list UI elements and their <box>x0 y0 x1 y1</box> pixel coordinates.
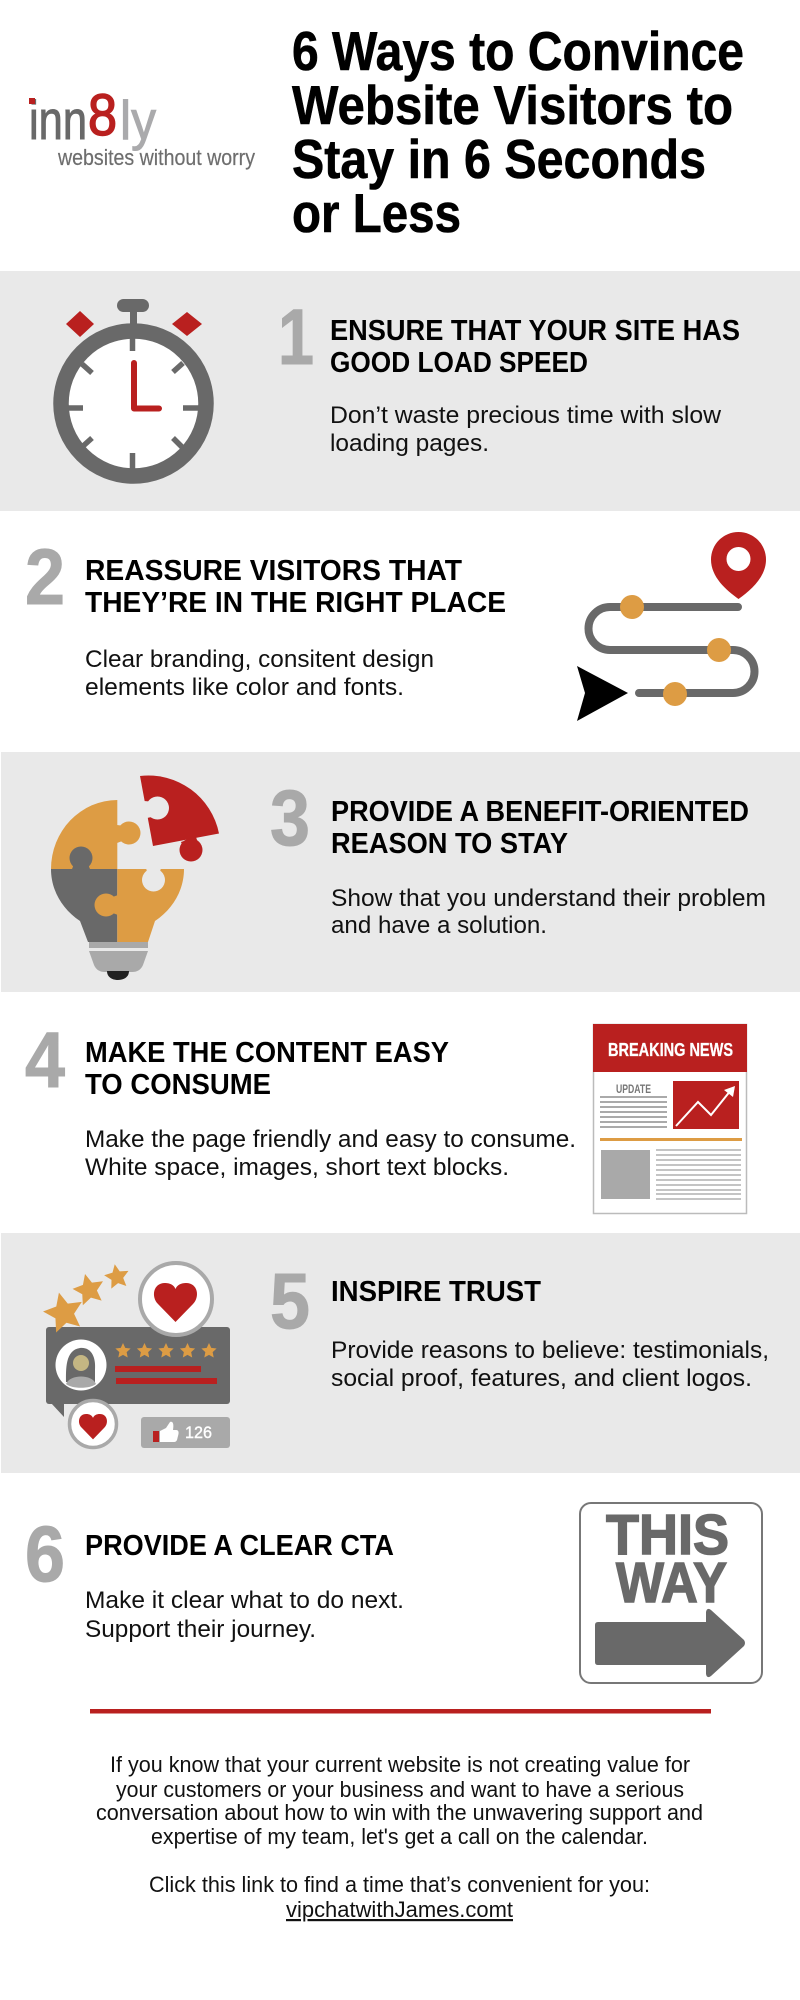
body 3: Show that you understand their problem <box>331 885 766 912</box>
heading 4 <box>85 1037 449 1101</box>
logo <box>29 83 255 170</box>
title: 6 Ways to Convince <box>292 20 744 82</box>
title: Website Visitors to <box>292 74 733 136</box>
body 1 <box>330 402 722 457</box>
body 5: Provide reasons to believe: testimonials, <box>331 1337 769 1364</box>
number 6: 6 <box>25 1509 65 1598</box>
logo: 8 <box>88 83 117 148</box>
icon: review bubble <box>40 1262 230 1448</box>
body 6: Make it clear what to do next. <box>85 1587 404 1614</box>
call to action link: Click this link to find a time that’s convenient for you: <box>149 1872 650 1897</box>
body 2: Clear branding, consitent design <box>85 646 434 673</box>
closing message: If you know that your current website is not creating value for <box>110 1752 690 1777</box>
heading 2 <box>85 555 506 619</box>
icon: route with map pin <box>577 532 766 721</box>
title: or Less <box>292 182 461 244</box>
icon: review bubble: 126 <box>185 1423 212 1442</box>
logo: websites without worry <box>57 145 255 170</box>
body 6 <box>85 1587 404 1643</box>
heading 1 <box>330 315 740 379</box>
body 6: Support their journey. <box>85 1616 316 1643</box>
heading 5: INSPIRE TRUST <box>331 1276 542 1308</box>
panel 1: load speed <box>0 271 800 511</box>
heading 1: GOOD LOAD SPEED <box>330 347 588 379</box>
logo: inn <box>29 89 87 151</box>
icon: newspaper: BREAKING NEWS <box>608 1039 733 1060</box>
closing message: your customers or your business and want to have a serious <box>116 1777 684 1802</box>
heading 4: TO CONSUME <box>85 1069 271 1101</box>
number 4: 4 <box>25 1015 65 1104</box>
body 4: White space, images, short text blocks. <box>85 1154 509 1181</box>
closing message: conversation about how to win with the unwavering support and <box>96 1800 703 1825</box>
title <box>292 20 744 244</box>
body 2 <box>85 646 434 701</box>
number 3: 3 <box>270 773 310 862</box>
body 4 <box>85 1126 576 1181</box>
heading 6: PROVIDE A CLEAR CTA <box>85 1530 394 1562</box>
heading 3: REASON TO STAY <box>331 828 568 860</box>
heading 2: REASSURE VISITORS THAT <box>85 555 463 587</box>
logo: ly <box>120 89 156 151</box>
panel 3: benefit <box>1 752 800 992</box>
heading 3 <box>331 796 749 860</box>
body 5: social proof, features, and client logos. <box>331 1365 752 1392</box>
body 4: Make the page friendly and easy to consume. <box>85 1126 576 1153</box>
icon: stopwatch <box>61 299 206 476</box>
panel 5: trust <box>1 1233 800 1473</box>
call to action link: vipchatwithJames.comt <box>286 1897 513 1922</box>
icon: this way sign: THIS <box>606 1503 729 1567</box>
panel 4: easy content <box>25 1015 747 1214</box>
panel 6: CTA <box>25 1503 762 1683</box>
icon: newspaper <box>593 1024 747 1214</box>
number 1: 1 <box>278 292 314 381</box>
body 3: and have a solution. <box>331 912 547 939</box>
body 5 <box>331 1337 769 1392</box>
closing message <box>96 1752 703 1849</box>
closing message: expertise of my team, let's get a call on the calendar. <box>151 1824 648 1849</box>
icon: newspaper: UPDATE <box>616 1082 651 1096</box>
panel 2: right place <box>25 532 766 721</box>
number 2: 2 <box>25 532 65 621</box>
number 5: 5 <box>270 1256 310 1345</box>
icon: puzzle light bulb <box>51 776 219 980</box>
icon: this way sign: WAY <box>616 1551 727 1615</box>
title: Stay in 6 Seconds <box>292 128 706 190</box>
body 3 <box>331 885 766 939</box>
heading 2: THEY’RE IN THE RIGHT PLACE <box>85 587 506 619</box>
call to action link <box>149 1872 650 1922</box>
heading 1: ENSURE THAT YOUR SITE HAS <box>330 315 740 347</box>
icon: this way sign <box>580 1503 762 1683</box>
heading 3: PROVIDE A BENEFIT-ORIENTED <box>331 796 749 828</box>
body 2: elements like color and fonts. <box>85 674 404 701</box>
body 1: loading pages. <box>330 430 489 457</box>
body 1: Don’t waste precious time with slow <box>330 402 722 429</box>
heading 4: MAKE THE CONTENT EASY <box>85 1037 449 1069</box>
